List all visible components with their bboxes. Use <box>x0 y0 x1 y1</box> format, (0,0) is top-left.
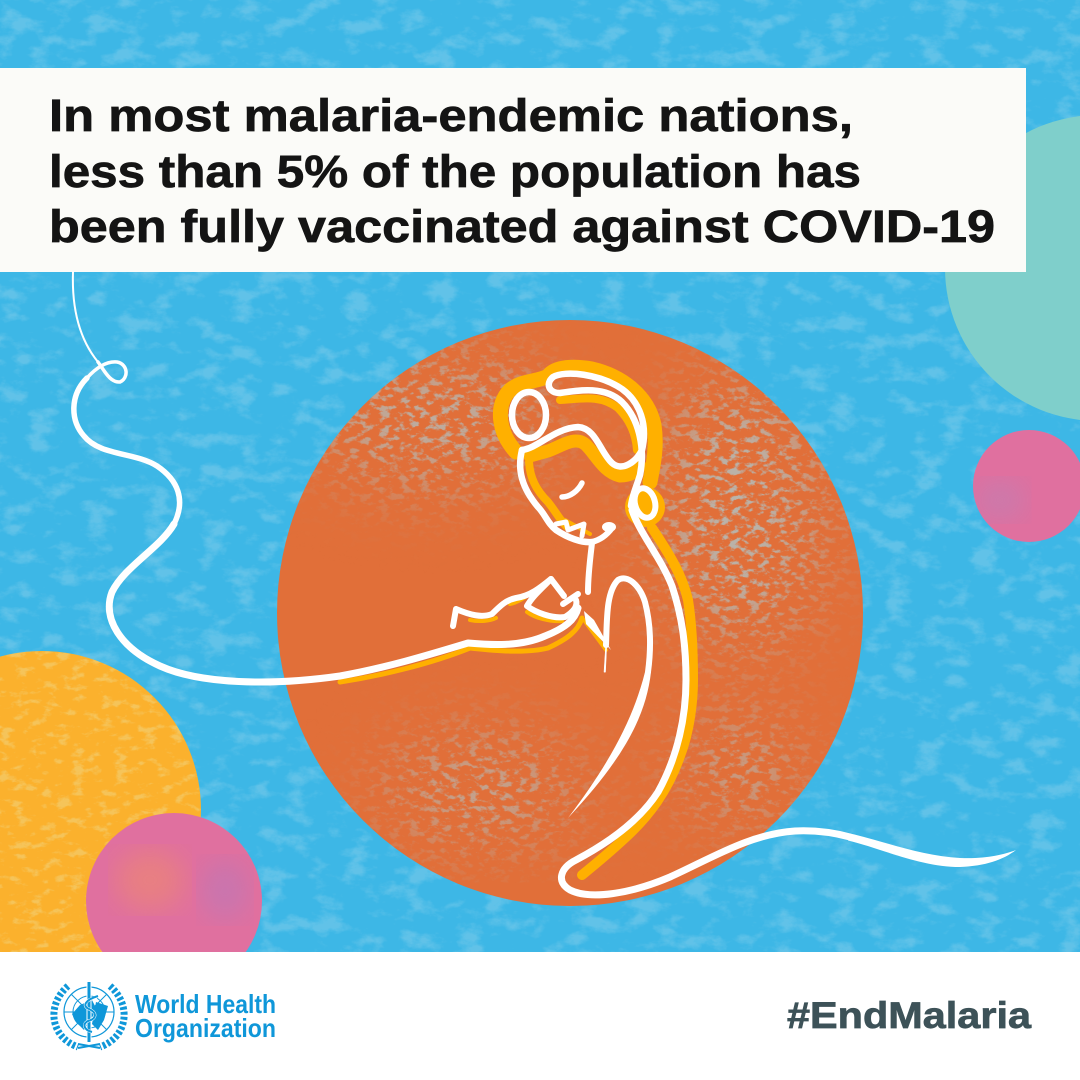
headline text <box>49 90 995 252</box>
hashtag: #EndMalaria <box>787 995 1031 1036</box>
logo: World Health Organization <box>54 982 276 1048</box>
tapered tail <box>848 834 1016 867</box>
logo wordmark: Organization <box>135 1013 276 1043</box>
illustration: yellow shadow of the figure <box>340 367 693 875</box>
illustration: head, hair and back outline <box>512 374 1016 895</box>
logo wordmark <box>135 989 276 1043</box>
illustration: inner arm line <box>568 578 651 818</box>
circle: pink right <box>973 430 1080 542</box>
circle: large orange <box>270 310 870 920</box>
icon: closed eye <box>562 483 582 497</box>
headline text: less than 5% of the population has <box>49 146 861 197</box>
illustration: flowing white line of the arm <box>73 272 578 682</box>
icon: syringe needle <box>584 611 611 650</box>
logo wordmark: World Health <box>135 989 276 1019</box>
icon: hair loop <box>631 486 659 520</box>
circle: pale teal top right <box>945 115 1080 421</box>
headline text: been fully vaccinated against COVID-19 <box>49 201 995 252</box>
chin and mouth <box>556 522 584 536</box>
icon: WHO emblem <box>54 982 124 1048</box>
neck line <box>588 543 592 592</box>
headline text: In most malaria-endemic nations, <box>49 90 853 141</box>
circle: pink bottom left <box>86 813 262 952</box>
headline banner <box>0 68 1026 272</box>
illustration: hand holding syringe <box>453 579 611 672</box>
footer strip <box>0 952 1080 1080</box>
circle: yellow bottom left <box>0 651 201 969</box>
icon: yellow earring blob <box>625 487 665 527</box>
